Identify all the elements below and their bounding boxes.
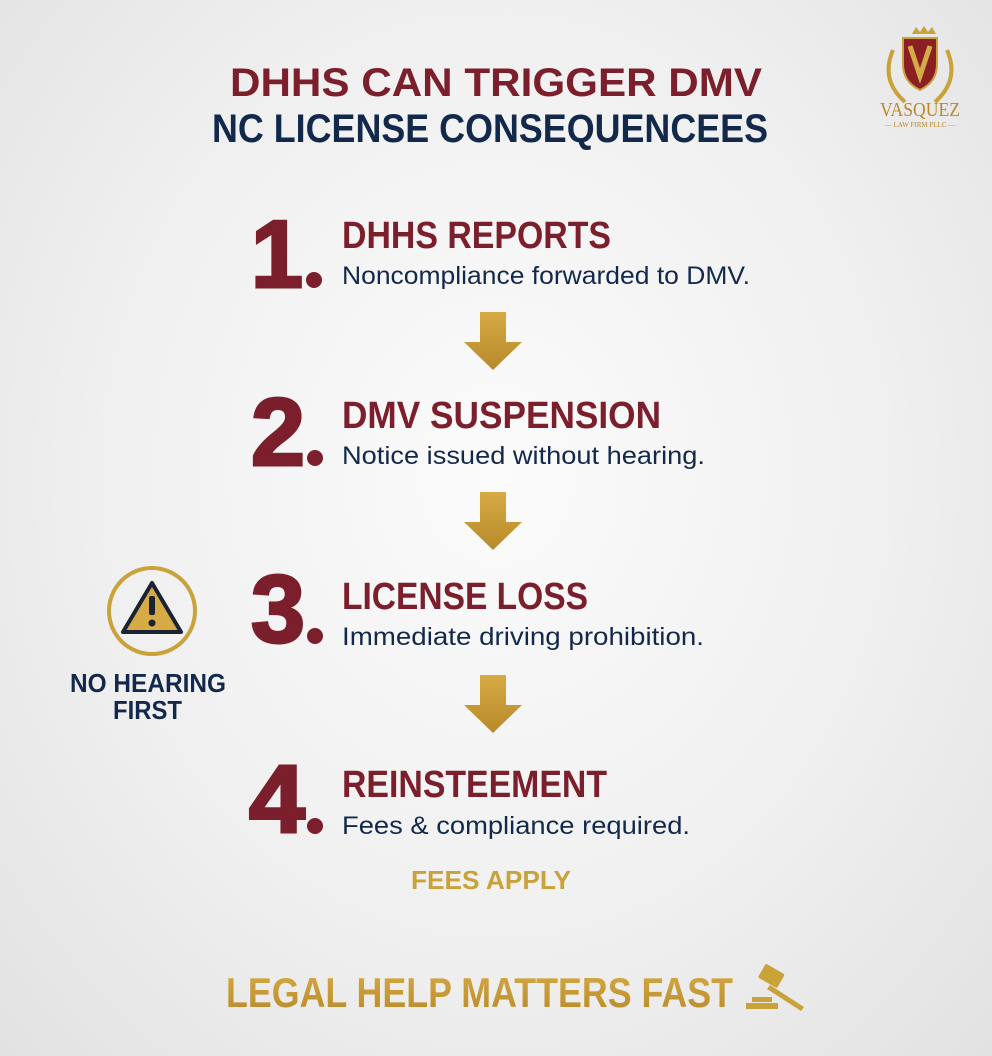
step 4: REINSTEEMENT: [342, 764, 607, 806]
footer: LEGAL HELP MATTERS FAST: [226, 969, 733, 1016]
warning callout: FIRST: [113, 695, 182, 725]
step 4: Fees & compliance required.: [342, 812, 690, 840]
title: DHHS CAN TRIGGER DMV: [230, 61, 762, 105]
logo: VASQUEZ: [880, 99, 960, 121]
fees apply note: FEES APPLY: [411, 865, 571, 895]
step 1: DHHS REPORTS: [342, 215, 611, 257]
step 1: [251, 201, 750, 308]
icon: gavel: [746, 964, 804, 1011]
step 2: DMV SUSPENSION: [342, 395, 661, 437]
step 2: Notice issued without hearing.: [342, 442, 705, 470]
step 4: [249, 746, 690, 853]
logo: [880, 26, 960, 129]
step 3: Immediate driving prohibition.: [342, 623, 704, 651]
logo: — LAW FIRM PLLC —: [884, 121, 956, 129]
step 3: LICENSE LOSS: [342, 576, 588, 618]
step 4: 4: [249, 746, 305, 853]
step 2: 2: [251, 379, 305, 486]
step 1: Noncompliance forwarded to DMV.: [342, 262, 750, 290]
warning callout: [70, 568, 226, 725]
arrow 3: [464, 675, 522, 733]
step 2: [251, 379, 705, 486]
title: [212, 61, 768, 151]
step 3: [251, 556, 704, 663]
warning callout: NO HEARING: [70, 668, 226, 698]
step 3: 3: [251, 556, 305, 663]
step 1: 1: [251, 201, 303, 308]
arrow 1: [464, 312, 522, 370]
title: NC LICENSE CONSEQUENCEES: [212, 107, 768, 151]
arrow 2: [464, 492, 522, 550]
